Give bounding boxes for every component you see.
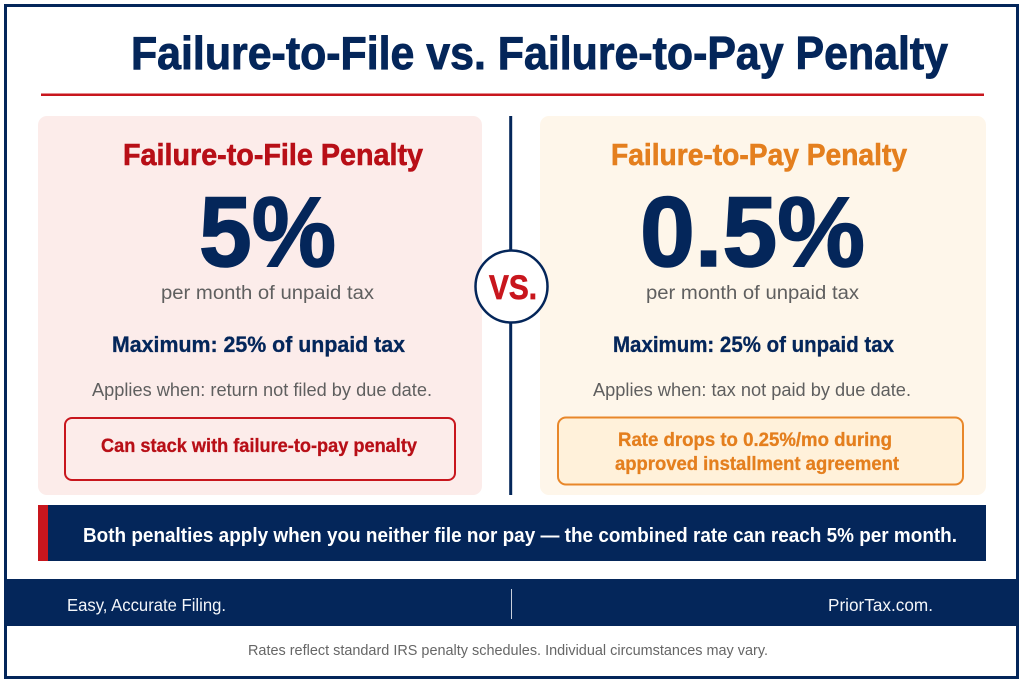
right maximum: Maximum: 25% of unpaid tax [613,332,895,357]
right applies when: Applies when: tax not paid by due date. [593,380,911,400]
right rate: 0.5% [640,176,865,287]
right panel heading: Failure-to-Pay Penalty [611,137,908,172]
footer tagline: Easy, Accurate Filing. [67,595,226,615]
right callout [558,418,963,484]
right rate caption: per month of unpaid tax [646,283,860,304]
footer band [6,579,1018,626]
panel: failure-to-file [38,116,482,495]
summary banner: Both penalties apply when you neither file nor pay — the combined rate can reach 5% per month. [83,525,957,547]
right callout: Rate drops to 0.25%/mo during [618,430,892,451]
left rate: 5% [199,176,336,287]
footer website: PriorTax.com. [828,595,933,615]
left panel heading: Failure-to-File Penalty [123,137,424,172]
VS badge: VS. [489,269,537,307]
disclaimer: Rates reflect standard IRS penalty schedules. Individual circumstances may vary. [248,643,768,659]
right callout: approved installment agreement [615,454,900,475]
VS badge [476,250,548,322]
title: Failure-to-File vs. Failure-to-Pay Penalty [131,27,948,79]
left maximum: Maximum: 25% of unpaid tax [112,332,406,357]
left applies when: Applies when: return not filed by due date. [92,380,432,400]
panel: failure-to-pay [540,116,986,495]
left rate caption: per month of unpaid tax [161,283,375,304]
left callout [65,418,455,480]
left callout: Can stack with failure-to-pay penalty [101,436,417,457]
summary banner [38,505,986,561]
